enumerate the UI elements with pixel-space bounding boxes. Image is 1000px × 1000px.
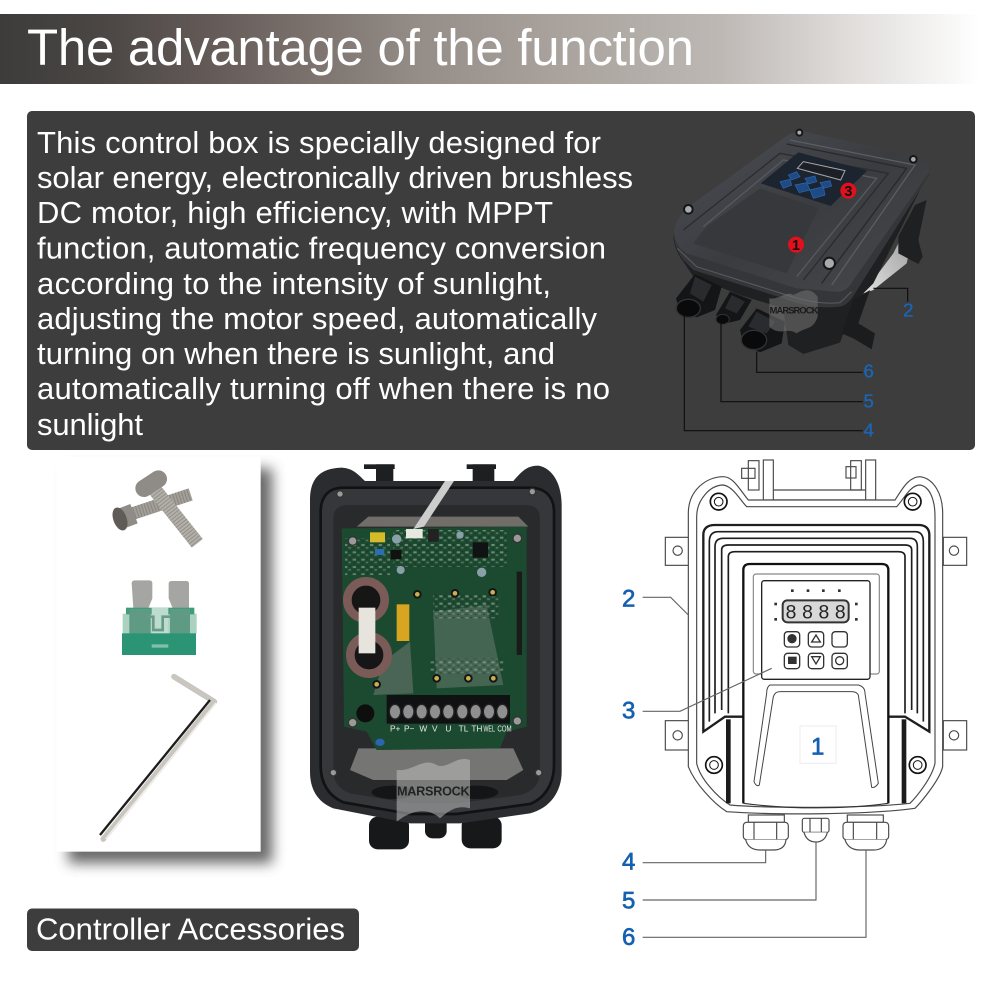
cable gland 5 (716, 292, 752, 324)
callout numbers: 2 (622, 586, 635, 613)
callout numbers: 4 (622, 848, 635, 875)
terminal labels: TH (471, 724, 482, 734)
description text: solar energy, electronically driven brushless (37, 160, 633, 195)
front mounting foot (842, 290, 875, 349)
icon: fuse (122, 580, 197, 655)
description text: sunlight (37, 407, 143, 442)
terminal labels: U (445, 724, 451, 734)
description text: function, automatic frequency conversion (37, 230, 606, 266)
recesses (372, 786, 498, 799)
diagram: labelled line drawing (622, 460, 967, 951)
flat ribbon cable (413, 481, 454, 529)
badge 3: 3 (844, 184, 852, 200)
control panel (761, 152, 867, 206)
description text: This control box is specially designed for (37, 125, 601, 160)
card (57, 457, 261, 852)
heat-sink fins (703, 525, 929, 732)
housing (310, 466, 562, 823)
inner floor (333, 505, 540, 803)
dark side strips (726, 719, 906, 803)
terminal labels: V (432, 724, 438, 734)
watermark: MARSROCK (770, 305, 819, 315)
panel: accessories (57, 457, 272, 863)
callout numbers: 3 (622, 697, 635, 724)
indicator LEDs (774, 589, 858, 621)
screws (684, 130, 917, 269)
trapezoid recess (754, 685, 878, 787)
inset panel (693, 188, 818, 273)
cable gland 5 (802, 818, 829, 842)
rear mounting foot (898, 200, 927, 264)
outer housing (688, 477, 943, 814)
cover ribs (683, 140, 915, 285)
LED display: 8888 (786, 602, 846, 623)
terminal labels: WEL (483, 724, 495, 734)
leader lines (643, 597, 866, 937)
leader lines (684, 288, 908, 431)
header banner (0, 14, 1000, 84)
hinge clips (364, 464, 496, 484)
mounting ears (665, 537, 967, 750)
callout numbers: 4 (863, 420, 874, 441)
corner screws (706, 493, 926, 773)
cable gland 4 (743, 815, 788, 850)
description text: according to the intensity of sunlight, (37, 266, 551, 301)
metal plate top (357, 517, 528, 527)
panel: function description (27, 111, 975, 450)
terminal labels: P− (404, 724, 415, 734)
photo: open controller (310, 464, 562, 849)
callout numbers: 6 (622, 924, 635, 951)
callout numbers (622, 586, 824, 951)
callout numbers: 2 (903, 300, 914, 321)
blue jumper (375, 739, 385, 746)
rim band (673, 170, 929, 307)
title: The advantage of the function (27, 19, 694, 76)
icon: bolts (110, 479, 197, 543)
white side of housing (863, 207, 920, 293)
callout numbers: 5 (622, 887, 635, 914)
inner housing line (697, 485, 935, 807)
cable glands (369, 817, 502, 849)
front face (743, 564, 888, 803)
display (797, 162, 845, 180)
cable gland 4 (676, 274, 722, 317)
front edge (743, 803, 888, 808)
description text: automatically turning off when there is no (37, 371, 610, 406)
footer label: Controller Accessories: Controller Accessories (36, 912, 345, 946)
callout numbers: 5 (863, 390, 874, 411)
description text: turning on when there is sunlight, and (37, 336, 555, 371)
badge 1: 1 (792, 238, 800, 254)
badge 3 (840, 183, 856, 200)
cable gland 6 (740, 308, 785, 352)
cable gland 6 (843, 815, 889, 850)
MOSFETs (373, 589, 497, 688)
photo: control box with callouts (673, 130, 929, 441)
lower housing (673, 173, 928, 354)
watermark (397, 759, 471, 822)
keypad (780, 172, 832, 198)
circuit board (342, 527, 527, 750)
yellow capacitor (397, 604, 409, 641)
rim highlight (677, 248, 852, 303)
keypad buttons (784, 632, 847, 669)
icon: hex key (100, 677, 216, 839)
hinges (742, 460, 876, 500)
board screws (330, 488, 542, 776)
callout numbers: 1 (811, 733, 824, 760)
terminal labels (390, 724, 512, 734)
terminal labels: P+ (390, 724, 401, 734)
badge 1 (788, 237, 804, 254)
control panel (753, 574, 879, 679)
top cover (674, 131, 928, 292)
card shadow (68, 468, 272, 863)
watermark (769, 290, 819, 333)
callout numbers: 6 (863, 361, 874, 382)
board texture (345, 530, 507, 695)
toroid coils (347, 581, 388, 674)
gasket rim (321, 488, 554, 814)
metal plate bottom (350, 748, 523, 780)
components (370, 529, 522, 655)
terminal labels: COM (497, 724, 512, 734)
watermark: MARSROCK (397, 785, 471, 799)
description text: DC motor, high efficiency, with MPPT (37, 195, 553, 230)
terminal labels: W (419, 724, 427, 734)
terminal labels: TL (459, 724, 469, 734)
description text (37, 125, 633, 442)
description text: adjusting the motor speed, automatically (37, 301, 598, 336)
buzzer (356, 704, 374, 722)
callout numbers (863, 300, 914, 441)
label box 1 (800, 726, 836, 763)
terminal block (387, 695, 510, 724)
